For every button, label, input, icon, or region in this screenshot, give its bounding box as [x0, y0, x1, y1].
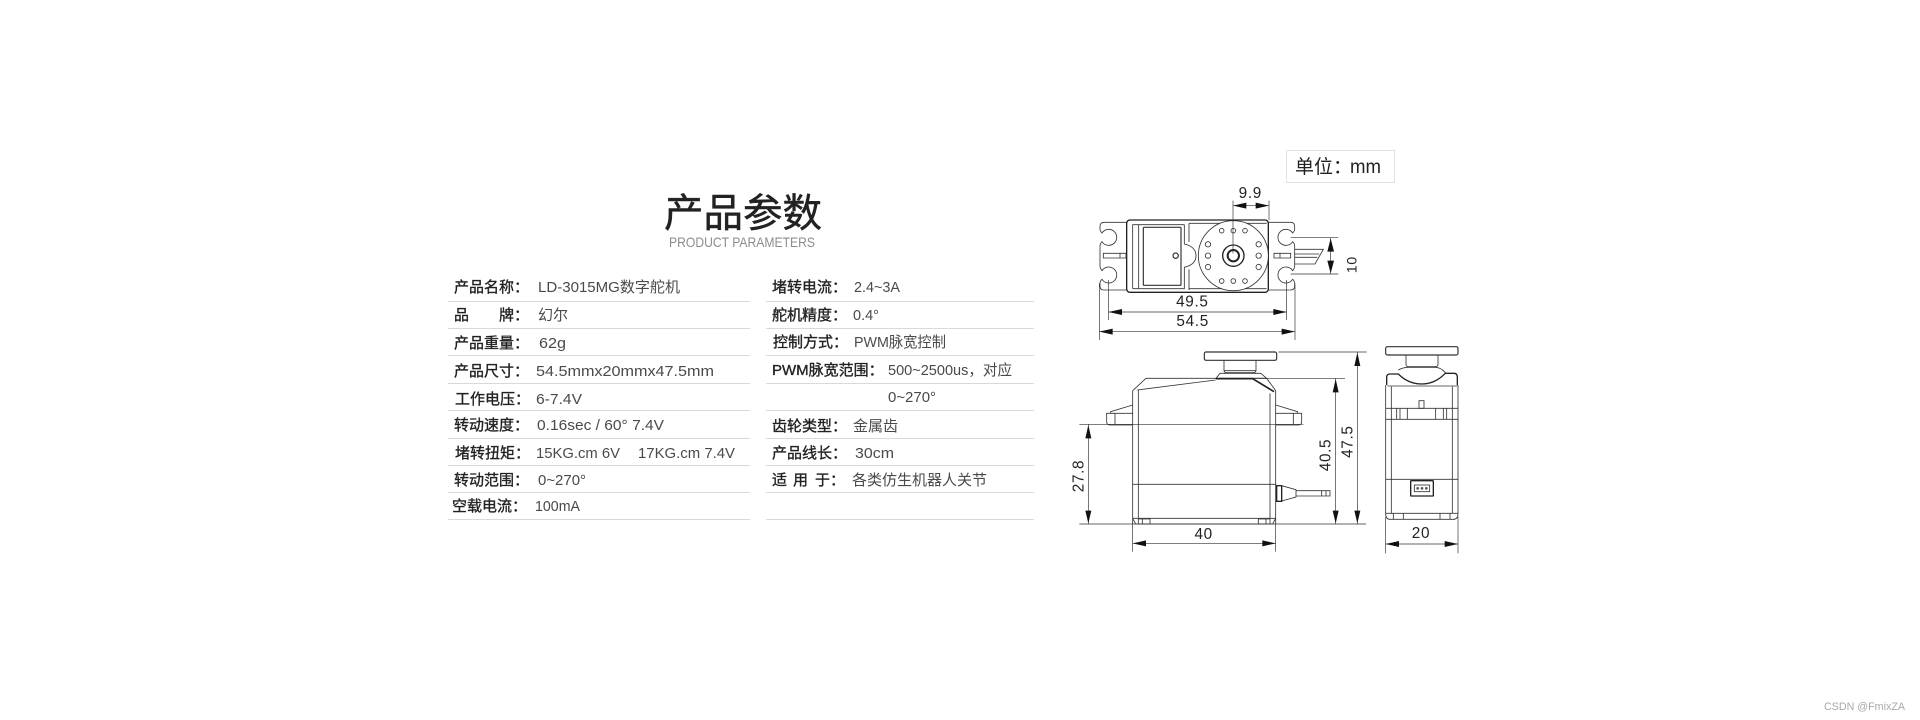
row: pwm range: [772, 361, 1012, 406]
dimension: 54.5: [1099, 283, 1295, 340]
row: application: 于：: [815, 472, 845, 489]
row: no-load current: 100mA: [535, 498, 580, 515]
row: control mode: PWM脉宽控制: [854, 334, 946, 351]
row: brand: 牌：: [499, 307, 529, 324]
row: stall torque: [455, 445, 735, 462]
dimension: 54.5: 54.5: [1176, 313, 1209, 330]
row: product name: LD-3015MG数字舵机: [538, 279, 680, 296]
dimension: 20: [1386, 517, 1458, 553]
row: gear type: [772, 418, 898, 435]
row: stall torque: 17KG.cm 7.4V: [638, 445, 735, 462]
row: voltage: 工作电压：: [455, 391, 530, 408]
row: gear type: 金属齿: [853, 418, 898, 435]
row: weight: 62g: [539, 335, 566, 352]
row: application: 适: [772, 472, 787, 489]
row: size: [454, 363, 714, 380]
row: cable length: 30cm: [855, 445, 894, 462]
flange left: [1100, 222, 1127, 290]
row: speed: [454, 417, 664, 434]
row: rotation range: 0~270°: [538, 472, 586, 489]
row: application: [772, 472, 987, 489]
row: brand: 品: [454, 307, 469, 324]
horn: [1198, 221, 1268, 291]
cable stub: [1277, 486, 1330, 501]
row: application: 用: [793, 472, 808, 489]
watermark: CSDN @FmixZA: [1824, 701, 1906, 713]
dimension: 10: [1291, 238, 1359, 274]
row: product name: 产品名称：: [454, 279, 529, 296]
row: rotation range: 转动范围：: [454, 472, 529, 489]
dimension: 20: 20: [1412, 525, 1430, 542]
row: pwm range: 0~270°: [888, 389, 936, 406]
unit label: [1286, 150, 1394, 182]
dimension: 47.5: [1278, 352, 1367, 524]
flanges: [1107, 405, 1302, 425]
row: stall torque: 15KG.cm 6V: [536, 445, 620, 462]
row: brand: [454, 307, 568, 324]
row: speed: 0.16sec / 60° 7.4V: [537, 417, 664, 434]
dimension: 40: 40: [1194, 526, 1213, 543]
wires: [1295, 249, 1323, 264]
row: application: 各类仿生机器人关节: [852, 472, 987, 489]
dimension: 49.5: [1109, 280, 1287, 320]
row: precision: 舵机精度：: [772, 307, 847, 324]
row: weight: 产品重量：: [454, 335, 529, 352]
flange right: [1268, 222, 1295, 290]
case: [1133, 378, 1276, 524]
dimension: 47.5: 47.5: [1340, 425, 1357, 458]
row: brand: 幻尔: [538, 307, 568, 324]
output horn: [1386, 347, 1458, 373]
dimension: 9.9: 9.9: [1239, 185, 1262, 202]
row: control mode: [773, 334, 946, 351]
row: precision: 0.4°: [853, 307, 879, 324]
row: pwm range: PWM脉宽范围：: [772, 362, 884, 379]
dimension: 40: [1133, 524, 1276, 552]
title: product parameters: 产品参数: [664, 192, 822, 236]
row: cable length: 产品线长：: [772, 445, 847, 462]
dimension: 10: 10: [1343, 256, 1359, 273]
row: stall torque: 堵转扭矩：: [455, 445, 530, 462]
dimension: 49.5: 49.5: [1176, 294, 1209, 311]
row: cable length: [772, 445, 894, 462]
case: [1386, 373, 1458, 519]
drawing: side view with dimensions: [1070, 352, 1367, 552]
dimension: 40.5: [1267, 378, 1345, 524]
row: size: 产品尺寸：: [454, 363, 529, 380]
row: control mode: 控制方式：: [773, 334, 848, 351]
body: [1127, 220, 1268, 292]
row: no-load current: 空载电流：: [452, 498, 527, 515]
row: gear type: 齿轮类型：: [772, 418, 847, 435]
drawing: top view with dimensions: [1099, 185, 1359, 340]
row: stall current: 堵转电流：: [772, 279, 847, 296]
row: voltage: [455, 391, 582, 408]
connector: [1411, 481, 1433, 496]
output horn: [1204, 352, 1277, 378]
unit label: 单位：: [1295, 156, 1352, 178]
drawing: rear view with dimensions: [1386, 347, 1458, 553]
row: stall current: [772, 279, 900, 296]
row: voltage: 6-7.4V: [536, 391, 582, 408]
dimension: 27.8: 27.8: [1070, 460, 1087, 492]
row: size: 54.5mmx20mmx47.5mm: [536, 363, 714, 380]
row: speed: 转动速度：: [454, 417, 529, 434]
unit label: mm: [1350, 157, 1381, 178]
table: parameters right column: [766, 279, 1034, 520]
row: no-load current: [452, 498, 580, 515]
dimension: 27.8: [1070, 424, 1366, 524]
row: weight: [454, 335, 566, 352]
dimension: 9.9: [1233, 185, 1269, 253]
row: rotation range: [454, 472, 586, 489]
dimension: 40.5: 40.5: [1318, 439, 1335, 471]
table: parameters left column: [448, 279, 750, 520]
row: stall current: 2.4~3A: [854, 279, 900, 296]
title: product parameters: PRODUCT PARAMETERS: [669, 234, 815, 250]
row: pwm range: 500~2500us，对应: [888, 361, 1012, 379]
row: product name: [454, 279, 680, 296]
